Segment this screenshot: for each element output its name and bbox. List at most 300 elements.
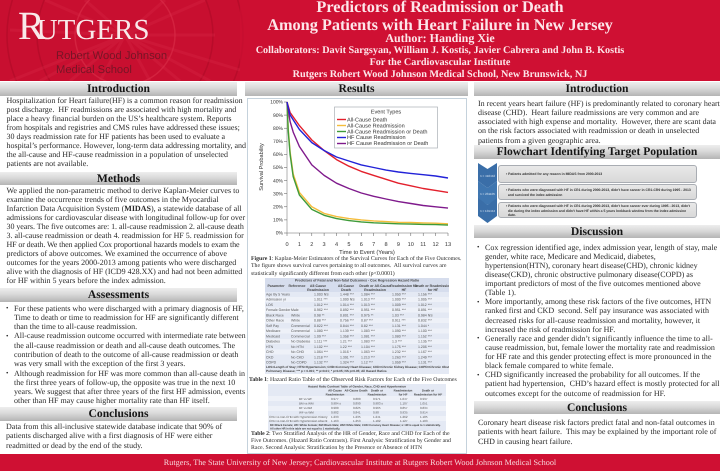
text: • (6, 368, 8, 376)
text: • (6, 304, 8, 312)
table 1 header row: All-Cause (310, 284, 326, 288)
table 1 body rows: Age By 5 Years (266, 292, 290, 296)
footer banner (0, 454, 720, 471)
y axis: 20% (273, 204, 284, 210)
heading: results (245, 82, 468, 96)
text: assessments bullets: Time to death or time to readmission for HF are significantly different (14, 313, 239, 322)
table 1 body rows: Medicare (266, 329, 280, 333)
curve: HF readmission or death (287, 102, 448, 208)
x axis: 3 (323, 242, 326, 248)
table 1 header row (267, 284, 451, 292)
table 2 body rows: 0.98 (373, 410, 379, 414)
x axis: 5 (347, 242, 350, 248)
text: introduction left: place a heavy financial burden on the US’s healthcare system. Reports (6, 114, 232, 123)
text: discussion bullets: for HF rate and this gender protecting effect is more pronounced in the (485, 352, 711, 361)
text: assessments bullets: Although readmission for HF was more common than all-cause death in (14, 369, 245, 378)
table 2 body rows: 1.127 (400, 419, 408, 423)
table 2 body rows: 0.841 (353, 410, 361, 414)
footer banner: Rutgers, The State University of New Jersey; Cardiovascular Institute at Rutgers Robert Wood Johnson Medical School (164, 458, 556, 467)
flowchart box 3 (498, 202, 697, 218)
table 1 body rows: 1.324 *** (340, 360, 354, 364)
y axis: 90% (273, 113, 284, 119)
heading: introduction left (0, 82, 237, 96)
table 1 body rows: Diabetes (266, 340, 280, 344)
text: • (477, 334, 479, 342)
text: methods: predictors of above outcomes. We examined the occurrence of above (6, 249, 227, 258)
table 2 header row: Readmission (326, 392, 344, 396)
text: methods: alive with the diagnosis of HF (ICD9 428.XX) and had not been admitted (6, 267, 242, 276)
table 1 body rows: 1.175 *** (392, 345, 406, 349)
text: methods: 3. all-cause readmission or death 4. readmission for HF 5. readmission for (6, 231, 244, 240)
x axis: 7 (372, 242, 375, 248)
caption: table 2: Race. Second Analysis: Stratification by the Presence or Absence of HTN (251, 445, 422, 451)
table 2 body rows: 0.984 s (331, 402, 341, 406)
table 1 body rows: No CKD (291, 356, 304, 360)
curve: all-cause readmission or death (287, 102, 448, 225)
table 2 header row: for HF (399, 392, 408, 396)
text: discussion bullets: black female compared to white female. (485, 361, 613, 370)
table 1 body rows: 1.218 *** (314, 356, 328, 360)
x axis title: Time to Event (Years) (339, 249, 395, 256)
table 2 body rows: 1.163 (331, 419, 339, 423)
table 2 body rows: 0.982 (331, 410, 339, 414)
table 1 body rows: 1.044 * (418, 324, 430, 328)
author: Author: Handing Xie (385, 31, 495, 45)
chevron step 2: n = 231105 (480, 192, 495, 196)
table 2 body rows: 0.834 (420, 406, 428, 410)
x axis: 1 (298, 242, 301, 248)
table 1 header row: for HF (428, 288, 439, 292)
table 1 body rows: 1.167 *** (418, 350, 432, 354)
table 2 body rows: BF vs BM (299, 406, 313, 410)
table 2 footnote: BF=Black Female; WF=White Female; BM=Black Male; WM=White Male; CHD=Coronary Heart Disease; s: HR is equal to 1 statistically. (270, 424, 441, 427)
text: discussion bullets: decreased risks for all-cause readmission and mortality, however, it (485, 316, 700, 324)
table 1 body rows: 1.100 *** (418, 329, 432, 333)
table 1 body rows: 1.139 *** (340, 329, 354, 333)
x axis (285, 233, 451, 248)
table 1 body rows: 0.962 *** (314, 308, 328, 312)
heading: introduction right: Introduction (566, 82, 628, 95)
table 2 header row: Readmission (368, 392, 386, 396)
table 1 body rows: CHD (266, 350, 274, 354)
table 1 body rows: No COPD (291, 360, 307, 364)
table 1 body rows: 1.156 *** (418, 292, 432, 296)
table 1 body rows: 0.756 *** (340, 319, 354, 323)
text: assessments bullets: other than HF may cause higher mortality rate than HF itself. (14, 396, 210, 405)
table 2: stratified hazard ratio contrasts: All other HR in this table are not equal to 1 statistically. (270, 428, 340, 430)
table 1 body rows: 0.87 *** (361, 319, 374, 323)
x axis: 0 (285, 242, 289, 248)
table 2 body rows: 0.980 (331, 406, 339, 410)
table 1 body rows: No Diabetes (291, 340, 311, 344)
table 1 header row: Readmission (364, 288, 386, 292)
flowchart box 3: • Patients who were diagnosed with HF in CR1 during 2000-2013, didn't have cancer ever during 1995 - 2013, didn't (506, 204, 690, 208)
table 1 body rows: 1.104 *** (361, 345, 375, 349)
curve: all-cause readmission (287, 102, 448, 224)
heading: introduction left: Introduction (87, 82, 150, 95)
logo: school name: Medical School (56, 64, 132, 76)
curve: HF readmission (287, 102, 448, 178)
table 1 body rows: 1.000 *** (392, 298, 406, 302)
table 1 body rows: Commercial (291, 334, 310, 338)
table 1 body rows: Other Race (266, 319, 284, 323)
heading: conclusions left (0, 407, 237, 421)
caption: table 2: Table 2: Two Stratified Analysis of the HR of Gender, Race and CHD for Each of the (251, 430, 450, 436)
table 2 body rows: WF vs WM (299, 410, 314, 414)
flowchart box 1: • Patients admitted for any reason in MIDAS from 2000-2013 (506, 172, 602, 176)
table 2 body rows: 0.825 (353, 406, 361, 410)
y axis: 60% (273, 152, 284, 158)
text: conclusions right: patients with heart failure. This may be explained by the important role of (478, 427, 716, 436)
caption: figure 1: Figure 1: Kaplan-Meier Estimators of the Survival Curves for Each of the Five Outcomes. (251, 256, 461, 262)
table 1 body rows: 1.21 *** (340, 340, 353, 344)
x axis: 8 (384, 242, 388, 248)
text: assessments bullets: contribution of death to the outcome of all-cause readmission or death (14, 350, 238, 359)
text: assessments bullets (6, 304, 246, 405)
table 1 body rows: 1.090 *** (392, 329, 406, 333)
table 2 header row: Readmission (394, 388, 412, 392)
table 1 body rows: 1.102 *** (314, 345, 328, 349)
heading: flowchart: Flowchart Identifying Target Population (497, 145, 697, 158)
heading: conclusions right (474, 401, 720, 414)
text: introduction right: associated with high expense and mortality. However, there are scant data (478, 117, 716, 126)
table 2 body rows: 0.890 (353, 402, 361, 406)
table 1 body rows: 1.111 *** (314, 340, 328, 344)
caption: figure 1: statistically significantly different from each other (p<0.0001) (251, 271, 395, 277)
heading: discussion (474, 225, 720, 238)
table 2 body rows: 1.047 (400, 397, 408, 401)
text: introduction right: disease (CHD). Heart failure readmissions are very common and are (478, 108, 699, 117)
table 1 header row: Death (341, 288, 351, 292)
heading: methods: Methods (97, 172, 140, 185)
text: methods: admissions for cardiovascular disease with longitudinal follow-up for over (6, 213, 245, 222)
y axis (270, 100, 448, 237)
text: introduction left: patients are not available. (6, 159, 88, 168)
chevron step 3: n = 101444 (480, 209, 495, 213)
table 1 body rows: 0.88 *** (314, 319, 327, 323)
table 2 body rows: BF vs WF (299, 397, 312, 401)
flowchart: chevrons (478, 163, 497, 223)
title: Among Patients with Heart Failure in New Jersey (267, 15, 613, 34)
table 2 body rows: BM vs WM (299, 402, 314, 406)
table 1 body rows: 1.013 *** (361, 298, 375, 302)
table 1 body rows: White (291, 314, 300, 318)
caption: figure 1 (251, 256, 462, 277)
legend: All-Cause Readmission (347, 122, 405, 129)
text: discussion bullets (477, 242, 720, 398)
text: discussion bullets: outcomes except for the outcome of readmission for HF. (485, 388, 665, 398)
table 2 body rows: 1.235 (353, 415, 361, 419)
table 1 body rows: 0.911 *** (392, 319, 406, 323)
table 1 body rows: LOS (266, 303, 274, 307)
flowchart box 1 (498, 165, 697, 183)
text: discussion bullets: Cox regression identified age, index admission year, length of stay, male (485, 242, 717, 252)
heading: assessments: Assessments (88, 288, 149, 301)
text: introduction left: hospital’s performance. However, long-term data addressing mortality, and (6, 141, 246, 150)
text: discussion bullets: cause readmission, but, female lower the mortality rate and readmission (485, 343, 715, 352)
table 1: hazard ratios: Predictors of Fatal and Non-fatal Outcomes - Cox Regression Hazard Ratio (295, 278, 419, 282)
panel: results frame (247, 98, 467, 454)
table 1 body rows: 0.801 *** (340, 314, 354, 318)
text: discussion bullets: CHD significantly increased the probability for all outcomes. If the (485, 370, 700, 379)
table 1 header row: Readmission for (390, 284, 418, 288)
table 1 body rows: Commercial (291, 324, 310, 328)
table 1 body rows: 0.892 *** (340, 308, 354, 312)
heading: conclusions right: Conclusions (567, 401, 627, 414)
table 1 body rows: 1.016 * (340, 350, 352, 354)
table 1 body rows: 0.984 NS (418, 314, 433, 318)
text: assessments bullets: All-cause readmission outcome occurred with intermediate rate between (14, 331, 246, 340)
text: • (477, 242, 479, 250)
table 1 body rows: Female Gender (266, 308, 291, 312)
table 1 body rows: 1.206 *** (418, 345, 432, 349)
flowchart box 3: die during the index admission and didn't have HF within a 5 years lookback window from the index admission (508, 209, 686, 213)
text: introduction left (6, 96, 246, 168)
table 1 body rows: 1.358 *** (340, 334, 354, 338)
table 1 body rows: 1.249 *** (418, 356, 432, 360)
y axis: 10% (273, 218, 284, 224)
x axis: 4 (335, 242, 338, 248)
table 2 body rows: 1.241 (373, 415, 381, 419)
text: introduction right: patients from a given geographic area. (478, 136, 601, 144)
table 2 header row: All-Cause Death (344, 388, 368, 392)
table 1 body rows: 1.081 *** (361, 334, 375, 338)
logo: Rutgers wordmark: RUTGERS (18, 3, 149, 48)
curves (287, 102, 448, 225)
heading: introduction right (474, 82, 720, 96)
text: assessments bullets: years. We suggest that after three years of the first HF admission, events (14, 387, 245, 396)
table 2 body rows: CHD vs non-CHD with Hypertension Absent (269, 419, 328, 423)
text: discussion bullets: ranked first and CKD second. Self pay insurance was associated with (485, 306, 709, 315)
table 1 body rows: 1.083 *** (361, 340, 375, 344)
text: methods: examine the occurrence trends of five outcomes in the Myocardial (6, 195, 219, 204)
heading: discussion: Discussion (571, 225, 623, 238)
table 1 body rows: CKD (266, 356, 274, 360)
x axis: 2 (310, 242, 313, 248)
text: assessments bullets: For these patients who were discharged with a primary diagnosis of HF, (14, 304, 244, 312)
table 2 body rows: 0.983 s (373, 402, 383, 406)
table 1 body rows: 1.152 *** (418, 334, 432, 338)
text: methods: 30 years. The five outcomes are: 1. all-cause readmission 2. all-cause death (6, 222, 244, 231)
collaborators: Collaborators: Davit Sargsyan, William J. Kostis, Javier Cabrera and John B. Kostis (256, 45, 624, 56)
table 1: hazard ratios: Pulmonary Disease; *** p < 0.001; ** p<0.01; * p<0.05; NS p>0.05; All Hazard Ratios (266, 369, 387, 373)
heading: conclusions left: Conclusions (89, 407, 148, 420)
x axis: 10 (408, 242, 414, 248)
table 2 body rows: 0.977 (331, 397, 339, 401)
table 1 body rows: 0.98 ** (314, 314, 325, 318)
table 1 body rows: 0.951 *** (361, 308, 375, 312)
text: conclusions left: Data from this all-inclusive statewide database indicate that 90% of (6, 422, 222, 430)
curve: all-cause death (287, 102, 448, 192)
table 2 body rows: 1.262 (400, 415, 408, 419)
table 2 body rows: 1.103 (420, 419, 428, 423)
table 1 body rows: 1.012 *** (314, 303, 328, 307)
y axis title: Survival Probability (258, 143, 265, 191)
table 1 body rows: 1.09 *** (314, 334, 327, 338)
table 1 body rows: 1.011 *** (314, 298, 328, 302)
caption: figure 1: The figure shows survival curves pertaining to all outcomes. All survival curves are (251, 263, 446, 269)
table 1 body rows: 0.975 ** (361, 314, 374, 318)
y axis: 40% (273, 178, 284, 184)
table 2 body rows: 0.997 (420, 397, 428, 401)
x axis: 11 (420, 242, 426, 248)
table 1 body rows: 1.131 *** (392, 324, 406, 328)
table 1 body rows: 0.891 *** (418, 308, 432, 312)
x axis: 12 (432, 242, 439, 248)
text: methods: Infarction Data Acquisition System (MIDAS), a statewide database of all (6, 204, 242, 213)
text: discussion bullets: Generally race and gender didn’t significantly influence the time to all- (485, 334, 713, 343)
caption: table 2 (251, 430, 451, 451)
table 2 header row: Death or (422, 388, 435, 392)
table 2 header row (326, 388, 442, 396)
legend: All-Cause Death (347, 116, 387, 124)
text: conclusions left: patients discharged alive with a first diagnosis of HF were either (6, 431, 212, 440)
text: introduction left: 30 days readmission rate for HF patients has been used to evaluate a (6, 132, 225, 141)
table 1 body rows: Medicaid (266, 334, 280, 338)
table 2 body rows: 1.233 (331, 415, 339, 419)
table 2 header row: Readmission for HF (414, 392, 442, 396)
line chart: Kaplan-Meier survival curves (258, 100, 451, 256)
table 1 body rows: 1.003 NS (314, 292, 329, 296)
rutgers seal watermark (6, 0, 240, 81)
flowchart box 2 (498, 184, 697, 200)
text: discussion bullets: More importantly, among these risk factors of the five outcomes, HTN (485, 297, 711, 306)
table 1 body rows: Black Race (266, 314, 284, 318)
heading: results: Results (338, 82, 375, 95)
text: introduction right (478, 98, 720, 145)
table 2 body rows: 0.965 (373, 406, 381, 410)
text: methods: We applied the non-parametric method to derive Kaplan-Meier curves to (6, 186, 239, 194)
logo: school name: Robert Wood Johnson (56, 50, 167, 62)
table 1 body rows: White (291, 319, 300, 323)
table 2 body rows: 0.880 (353, 397, 361, 401)
table 2: stratified hazard ratio contrasts (268, 384, 446, 431)
table 1 body rows: 1.000 NS (340, 298, 355, 302)
table 1 body rows: 1.012 *** (418, 303, 432, 307)
text: discussion bullets: gender, white race, Medicare and Medicaid, diabetes, (485, 252, 656, 261)
table 1 body rows: 0.822 *** (314, 324, 328, 328)
text: discussion bullets: disease(CKD), chronic obstructive pulmonary disease(COPD) as (485, 270, 693, 279)
y axis: 70% (273, 139, 284, 145)
flowchart box 3: date. (508, 213, 516, 217)
table 1 body rows: 1.080 *** (392, 334, 406, 338)
x axis: 9 (397, 242, 400, 248)
table 1 body rows: 1.135 *** (418, 340, 432, 344)
table 1 body rows: 1.3 *** (392, 340, 403, 344)
table 1 body rows: No HTN (291, 345, 304, 349)
table 2 body rows: 1.253 (353, 419, 361, 423)
table 2 body rows: CHD vs non-CHD with Hypertension History (269, 415, 328, 419)
text: methods (6, 186, 246, 285)
table 1 header row: All-Cause (338, 284, 354, 288)
text: introduction left: Hospitalization for Heart failure(HF) is a common reason for readmission (6, 96, 243, 104)
text: discussion bullets: increased the risk of readmission for HF. (485, 325, 615, 334)
title (256, 0, 624, 80)
table 2 body rows: 1.182 (373, 419, 381, 423)
text: methods: HF or death. We then applied Cox proportional hazards models to exam the (6, 240, 239, 249)
legend: All-Cause Readmission or Death (347, 128, 427, 135)
table 1 body rows: 0.832 *** (418, 319, 432, 323)
text: • (477, 298, 479, 306)
table 1 header row: Death or All-Cause (359, 284, 391, 288)
table 1 body rows: 1.22 *** (340, 345, 353, 349)
chevron step 1: n = 410442 (480, 174, 495, 178)
table 1 body rows: 1.03 *** (392, 314, 405, 318)
text: assessments bullets: the all-cause readmission or death and all-cause death outcomes. The (14, 341, 235, 350)
table 1 body rows: 1.013 *** (361, 303, 375, 307)
text: discussion bullets: hypertension(HTN), coronary heart disease(CHD), chronic kidney (485, 261, 698, 270)
caption: table 2: Five Outcomes. (Hazard Ratio Contrasts). First Analysis: Stratification by Gender and (251, 438, 451, 444)
table 1 body rows: 1.005 *** (418, 298, 432, 302)
table 1 header row: Parameter (267, 284, 285, 288)
table 1 body rows: 1.014 *** (340, 303, 354, 307)
table 1 body rows: 1.064 *** (314, 350, 328, 354)
x axis: 13 (445, 242, 451, 248)
table 2 body rows: 1.107 (400, 402, 408, 406)
table 2 header row: All-Cause (328, 388, 342, 392)
table 1 body rows: 1.263 *** (392, 356, 406, 360)
table 2 header row: Death or (371, 388, 384, 392)
text: introduction left: from hospitals and registries and CMS rules have addressed these issues; (6, 123, 240, 132)
text: introduction left: post discharge. HF readmissions are associated with high mortality and (6, 105, 236, 114)
table 1 body rows: Self Pay (266, 324, 279, 328)
table 1 header row: HF (402, 288, 407, 292)
affiliation: Rutgers Robert Wood Johnson Medical School, New Brunswick, NJ (293, 69, 587, 80)
table 1 body rows: 0.951 *** (392, 308, 406, 312)
table 1 body rows: 1.080 *** (314, 329, 328, 333)
text: discussion bullets: patient had hypertension, CHD’s hazard effect is mostly protected for all (485, 379, 719, 388)
table 1 body rows: Male (291, 308, 299, 312)
table 2 body rows: 1.185 (420, 415, 428, 419)
header banner (0, 0, 720, 81)
table 2 body rows: 1.051 (420, 402, 428, 406)
table 2 body rows: 0.971 (373, 397, 381, 401)
table 1 body rows: COPD (266, 360, 277, 364)
table 1 body rows: 1.131 *** (418, 360, 432, 364)
table 1 body rows: 0.82 *** (361, 324, 374, 328)
table 1 body rows: 1.232 *** (392, 350, 406, 354)
text: assessments bullets: than the time to all-cause readmission. (14, 322, 137, 331)
logo: school name (56, 50, 167, 76)
table 1 body rows: 1.084 *** (361, 292, 375, 296)
heading: assessments (0, 288, 237, 302)
table 1 header row: Readmission (307, 288, 329, 292)
text: methods: outcomes for the years 2000-2013 among patients who were discharged (6, 258, 236, 267)
table 2 body rows (269, 397, 428, 423)
y axis: 100% (270, 100, 284, 106)
table 1 body rows: 1.050 *** (392, 292, 406, 296)
text: assessments bullets: was very small with the exception of the first 3 years. (14, 359, 185, 368)
table 1 body rows: 1.009 *** (392, 303, 406, 307)
table 1 body rows: 1.059 *** (392, 360, 406, 364)
y axis: 0% (276, 231, 284, 237)
text: conclusions right: CHD in causing heart failure. (478, 436, 572, 446)
table 1 body rows: 1.132 *** (314, 360, 328, 364)
table 1 header row: Reference (289, 284, 306, 288)
legend: HF Cause Readmission (347, 134, 406, 141)
text: conclusions left: readmitted or dead by the end of the study. (6, 440, 143, 450)
heading: methods (0, 172, 237, 185)
legend: Event Types (371, 110, 401, 116)
legend: HF Cause Readmission or Death (347, 140, 428, 147)
text: assessments bullets: the first three years of follow-up, the opposite was true in the next 10 (14, 378, 235, 387)
text: conclusions right (478, 418, 716, 446)
text: methods: for HF within 5 years before the index admission. (6, 276, 166, 285)
text: • (6, 332, 8, 340)
x axis: 6 (360, 242, 363, 248)
text: • (477, 370, 479, 378)
table 2 body rows: 0.857 (400, 406, 408, 410)
